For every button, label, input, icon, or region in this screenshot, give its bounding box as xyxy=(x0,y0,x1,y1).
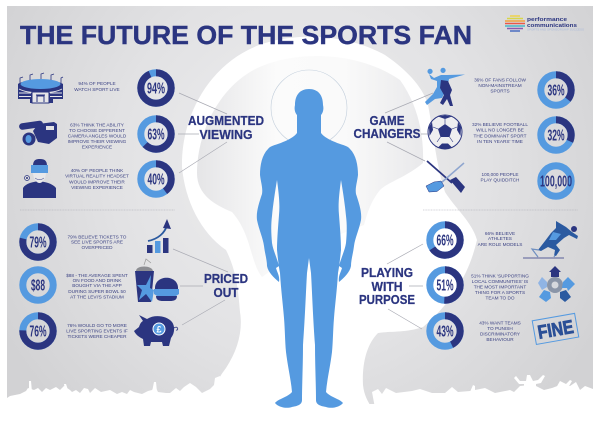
white halo silhouette xyxy=(182,37,477,408)
text: 32%: WILL NO LONGER BE xyxy=(476,128,524,132)
text: 63%: CAMERA ANGLES WOULD xyxy=(68,134,127,138)
icon: sprinter xyxy=(523,221,578,258)
text: 66%: 66% BELIEVE xyxy=(485,231,515,236)
donut 51%: 51% xyxy=(436,278,454,294)
text: $88: BOUGHT VIA THE APP xyxy=(72,283,122,288)
heading: priced out: PRICED xyxy=(204,272,248,286)
text: $88: DURING SUPER BOWL 50 xyxy=(68,289,126,294)
heading: playing with purpose: PLAYING xyxy=(361,266,413,280)
text: $88 xyxy=(66,273,128,300)
heading: game changers xyxy=(354,114,420,141)
logo: SPORTS AND SPONSORSHIP SUCCESS xyxy=(527,28,584,32)
heading: priced out xyxy=(204,272,248,300)
text: 100,000: 100,000 PEOPLE xyxy=(481,172,519,177)
icon: football xyxy=(428,115,462,150)
text: 63%: TO CHOOSE DIFFERENT xyxy=(69,128,125,133)
text: 94%: 94% OF PEOPLE xyxy=(78,81,116,86)
heading: game changers: CHANGERS xyxy=(354,127,420,141)
text: $88: ON FOOD AND DRINK xyxy=(73,278,122,283)
text: 63%: IMPROVE THEIR VIEWING xyxy=(68,139,127,144)
text: 36%: 36% OF FANS FOLLOW xyxy=(474,78,526,82)
icon: stadium xyxy=(18,73,63,103)
text: 100,000: PLAY QUIDDITCH xyxy=(481,178,519,182)
donut 76% xyxy=(23,316,53,346)
icon: quidditch broom and paddle xyxy=(426,161,465,193)
donut 63%: 63% xyxy=(148,126,165,144)
text: 63%: 63% THINK THE ABILITY xyxy=(70,122,125,128)
donut $88 xyxy=(23,270,53,300)
text: 51%: THE MOST IMPORTANT xyxy=(474,284,526,290)
icon: community gear xyxy=(538,266,575,302)
text: 79% xyxy=(68,234,127,250)
icon: VR headset viewer xyxy=(23,159,56,198)
icon: piggy bank xyxy=(134,315,178,346)
donut 100,000: 100,000 xyxy=(540,174,572,190)
text: 36% xyxy=(474,78,526,94)
text: 76%: LIVE SPORTING EVENTS IF xyxy=(66,328,128,334)
text: 51% xyxy=(471,274,529,300)
icon: piggy bank: £ xyxy=(156,324,162,334)
text: 94%: WATCH SPORT LIVE xyxy=(74,87,120,92)
connector lines xyxy=(173,93,433,329)
logo: performance xyxy=(527,17,568,23)
text: 43% xyxy=(479,320,521,342)
donut 63% xyxy=(141,119,171,149)
text: 40%: WOULD IMPROVE THEIR xyxy=(69,180,125,184)
heading: playing with purpose: PURPOSE xyxy=(359,293,415,307)
logo: communications xyxy=(527,23,577,29)
donut 79% xyxy=(23,227,53,257)
icon: drink cup xyxy=(135,259,154,302)
person halo ring xyxy=(271,70,347,146)
heading: augmented viewing xyxy=(188,114,264,142)
donut 32% xyxy=(541,120,571,150)
heading: augmented viewing: VIEWING xyxy=(200,128,252,142)
text: 43%: BEHAVIOUR xyxy=(486,337,514,342)
icon: fine stamp: FINE xyxy=(536,317,575,344)
text: 94% xyxy=(74,81,120,92)
heading: augmented viewing: AUGMENTED xyxy=(188,114,264,128)
text: 79%: 79% BELIEVE TICKETS TO xyxy=(68,234,127,240)
donut 43% xyxy=(430,316,460,346)
donut 66%: 66% xyxy=(436,232,454,250)
text: 32%: 32% BELIEVE FOOTBALL xyxy=(472,122,528,127)
crowd silhouette xyxy=(7,376,593,410)
text: 43%: TO PUNISH xyxy=(487,326,513,331)
text: 36%: NON-MAINSTREAM xyxy=(478,83,522,88)
donut 32%: 32% xyxy=(548,128,565,144)
text: 51%: LOCAL COMMUNITIES' IS xyxy=(472,279,528,284)
text: 51%: TEAM TO DO xyxy=(486,296,515,300)
crowd people raised arms xyxy=(29,375,572,400)
text: 66% xyxy=(478,231,522,247)
donut $88: $88 xyxy=(31,278,45,294)
donut 43%: 43% xyxy=(436,324,454,340)
icon: camera xyxy=(19,120,57,146)
text: 36%: SPORTS xyxy=(490,88,510,94)
text: 76% xyxy=(66,323,128,339)
text: $88: AT THE LEVI'S STADIUM xyxy=(70,294,124,300)
donut 100,000 xyxy=(540,166,572,196)
donut 66% xyxy=(430,225,460,255)
text: 76%: 76% WOULD GO TO MORE xyxy=(67,323,127,328)
donut 51% xyxy=(430,270,460,300)
icon: rising bar chart xyxy=(147,219,171,253)
donut 79%: 79% xyxy=(30,234,47,252)
text: 66%: ATHLETES xyxy=(488,236,512,241)
icon: burger xyxy=(154,278,179,301)
text: 51%: 51% THINK 'SUPPORTING xyxy=(471,274,529,278)
donut 94%: 94% xyxy=(147,80,165,98)
heading: game changers: GAME xyxy=(370,114,404,128)
donut 94% xyxy=(141,73,171,103)
text: 40%: 40% OF PEOPLE THINK xyxy=(71,168,124,173)
logo xyxy=(505,16,584,32)
text: 63% xyxy=(68,122,127,150)
dividers xyxy=(20,209,578,211)
title: THE FUTURE OF THE SPORTS FAN xyxy=(20,20,472,50)
donut 36%: 36% xyxy=(548,82,565,100)
text: 43%: DISCRIMINATORY xyxy=(480,332,521,336)
icon: players xyxy=(425,68,465,106)
text: 79%: OVERPRICED xyxy=(82,245,113,250)
text: 43%: 43% WANT TEAMS xyxy=(479,320,521,326)
heading: playing with purpose xyxy=(359,266,415,307)
text: 32% xyxy=(472,122,528,144)
text: 32%: IN TEN YEARS' TIME xyxy=(477,139,523,144)
donut 36% xyxy=(541,75,571,105)
person figure xyxy=(257,89,361,408)
text: 63%: EXPERIENCE xyxy=(82,144,112,150)
text: 76%: TICKETS WERE CHEAPER xyxy=(67,334,127,339)
text: 40%: VIRTUAL REALITY HEADSET xyxy=(65,174,129,178)
text: 66%: ARE ROLE MODELS xyxy=(478,242,522,247)
text: 40%: VIEWING EXPERIENCE xyxy=(71,185,123,190)
heading: priced out: OUT xyxy=(214,286,239,300)
text: 40% xyxy=(65,168,129,190)
text: $88: $88 - THE AVERAGE SPENT xyxy=(66,273,128,278)
text: 100,000 xyxy=(481,172,519,182)
text: 32%: THE DOMINANT SPORT xyxy=(474,134,527,138)
heading: playing with purpose: WITH xyxy=(372,280,402,294)
text: 79%: SEE LIVE SPORTS ARE xyxy=(71,240,123,244)
donut 40%: 40% xyxy=(148,172,165,188)
text: 51%: THING FOR A SPORTS xyxy=(475,290,525,295)
donut 40% xyxy=(141,164,171,194)
donut 76%: 76% xyxy=(30,324,47,340)
